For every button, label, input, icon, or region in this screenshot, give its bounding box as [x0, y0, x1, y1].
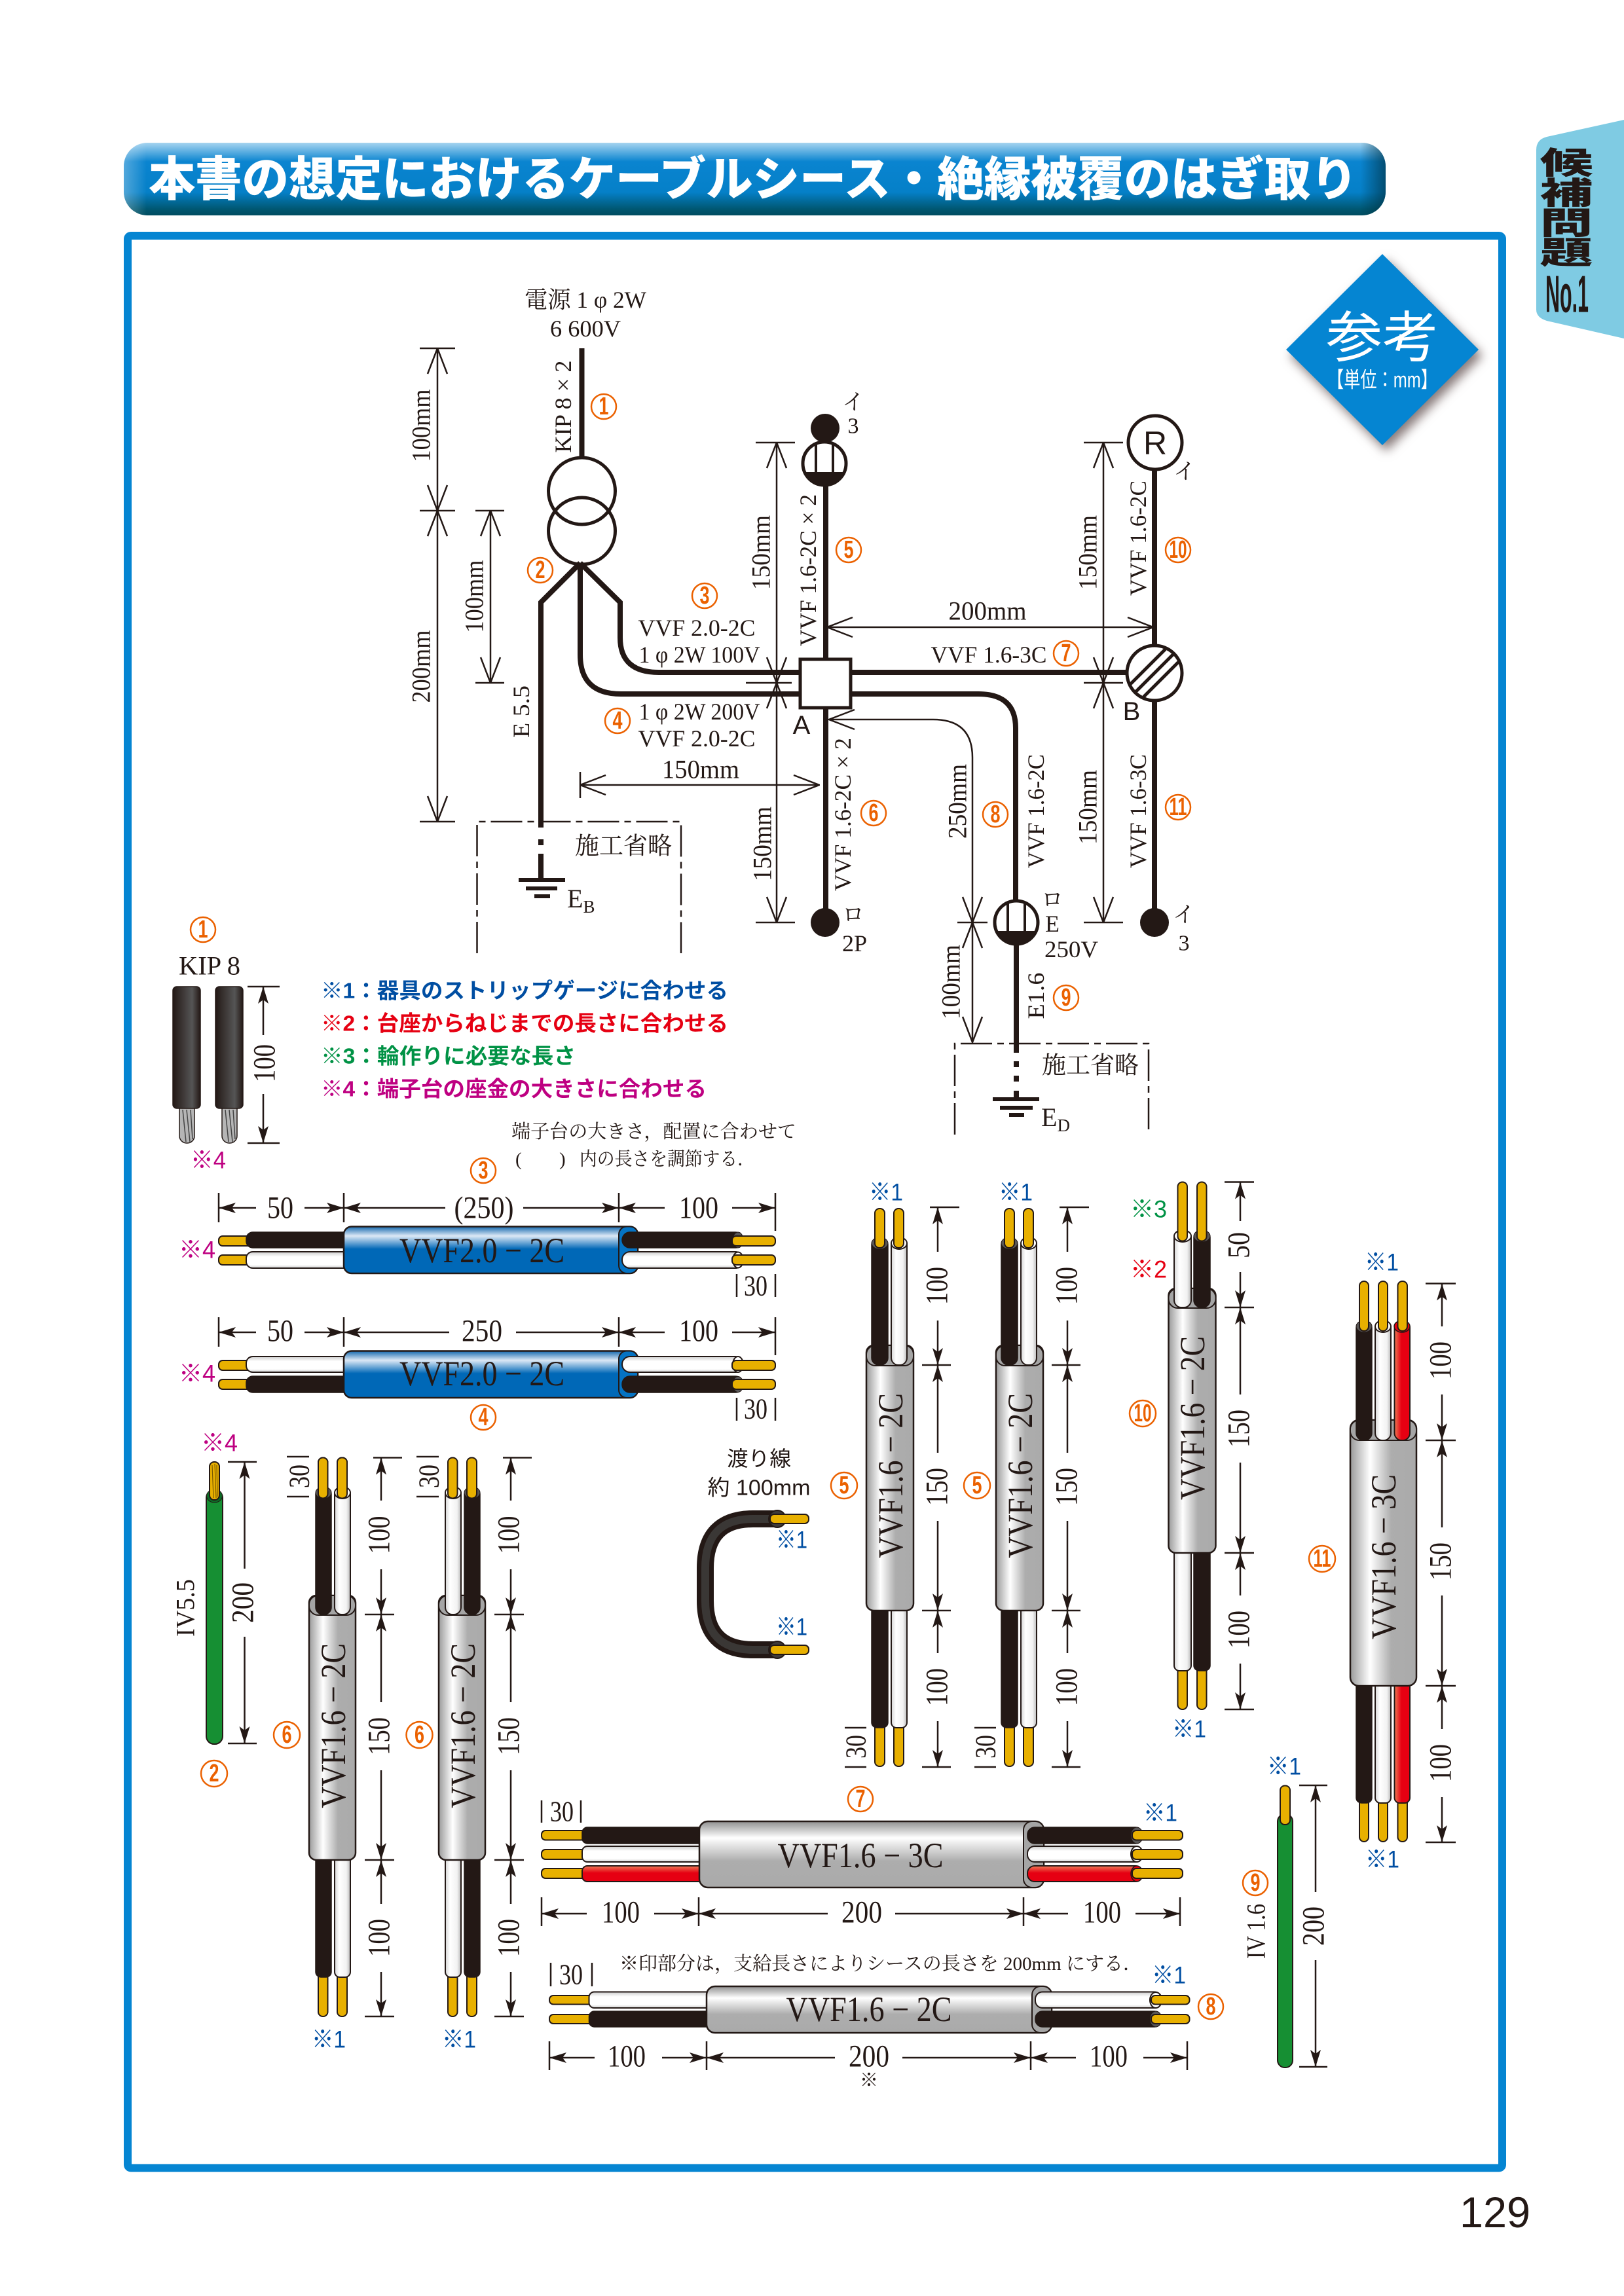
schematic dimension lines: 150mm — [1073, 515, 1103, 590]
part 11: VVF1.6-3C vertical: VVF1.6 − 3C — [1364, 1474, 1403, 1639]
ground ED: E — [1041, 1102, 1057, 1132]
switch ro 2P: ロ — [842, 903, 864, 927]
part 4: VVF2.0-2C blue cable: VVF2.0 − 2C — [399, 1354, 564, 1393]
wiring diagram — [406, 287, 1196, 1135]
wire labels: 1 φ 2W 200V — [639, 699, 760, 725]
part 2: IV5.5 green wire: 2 — [210, 1760, 219, 1787]
junction box A — [793, 486, 1128, 921]
title bar — [124, 143, 1386, 215]
power source label: 電源 1 φ 2W — [525, 287, 646, 313]
part 5: VVF1.6-2C vertical B: VVF1.6 − 2C — [1001, 1393, 1040, 1558]
wire labels: VVF 1.6-2C × 2 — [795, 494, 821, 646]
part 9: IV1.6 green wire — [1242, 1753, 1331, 2068]
part 4: VVF2.0-2C blue cable: 250 — [462, 1313, 502, 1349]
schematic dimension lines: 150mm — [1073, 770, 1103, 845]
part 8: VVF1.6-2C horizontal: ※1 — [1152, 1961, 1186, 1989]
part 8: VVF1.6-2C horizontal: 100 — [1090, 2039, 1128, 2074]
main frame — [128, 236, 1502, 2168]
part 5: VVF1.6-2C vertical B — [964, 1178, 1089, 1767]
note: terminal block adjustment: 内の長さを調節する． — [580, 1148, 755, 1170]
lamp R and box B: 3 — [1179, 931, 1189, 956]
switch ro 2P — [811, 903, 867, 957]
power source label — [525, 287, 646, 342]
part 9: IV1.6 green wire: IV 1.6 — [1242, 1904, 1270, 1959]
junction box A: A — [793, 711, 811, 740]
part 1: KIP 8 wires: 100 — [248, 1044, 282, 1082]
lamp R and box B: R — [1143, 425, 1167, 462]
wire labels: E 5.5 — [508, 685, 534, 738]
part 6: VVF1.6-2C vertical B: 30 — [413, 1465, 445, 1488]
schematic dimension lines: 150mm — [748, 807, 777, 881]
part 1: KIP 8 wires: 1 — [198, 916, 208, 943]
circled numbers on diagram: 3 — [699, 582, 710, 610]
ground ED: D — [1057, 1116, 1070, 1135]
part 5: VVF1.6-2C vertical B: 30 — [969, 1735, 1002, 1758]
power source label: 6 600V — [550, 316, 621, 342]
schematic dimension lines: 100mm — [460, 560, 489, 632]
wire labels — [508, 360, 1151, 1019]
note: sheath length: ※印部分は，支給長さによりシースの長さを 200mm にする． — [619, 1953, 1142, 1975]
circled numbers on diagram: 2 — [536, 556, 545, 584]
part 3: VVF2.0-2C blue cable: 100 — [679, 1190, 718, 1226]
lamp R and box B: イ — [1173, 903, 1195, 927]
part 6: VVF1.6-2C vertical B: 6 — [415, 1721, 424, 1749]
part 4: VVF2.0-2C blue cable — [179, 1313, 775, 1431]
part 6: VVF1.6-2C vertical B: ※1 — [442, 2026, 476, 2053]
part 8: VVF1.6-2C horizontal: 8 — [1206, 1993, 1215, 2020]
omitted work box left — [477, 822, 681, 953]
jumper wire: 約 100mm — [707, 1476, 811, 1499]
part 6: VVF1.6-2C vertical A: 100 — [361, 1516, 397, 1554]
circled numbers on diagram: 8 — [990, 801, 1001, 828]
part 9: IV1.6 green wire: 200 — [1297, 1906, 1331, 1946]
part 5: VVF1.6-2C vertical B: 100 — [1049, 1668, 1084, 1706]
wire labels: 1 φ 2W 100V — [639, 642, 760, 668]
note: terminal block adjustment — [511, 1121, 796, 1170]
part 7: VVF1.6-3C horizontal: 100 — [602, 1895, 640, 1930]
lamp R and box B: B — [1123, 697, 1140, 726]
ground ED — [993, 1099, 1070, 1135]
wire labels: VVF 2.0-2C — [638, 615, 756, 641]
part 10: VVF1.6-2C vertical: VVF1.6 − 2C — [1173, 1336, 1212, 1500]
part 4: VVF2.0-2C blue cable: 100 — [679, 1313, 718, 1349]
schematic dimension lines: 150mm — [747, 515, 775, 590]
jumper wire: 渡り線 — [727, 1447, 791, 1470]
part 5: VVF1.6-2C vertical B: 100 — [1049, 1267, 1084, 1305]
lamp R and box B: イ — [1173, 460, 1196, 484]
wire labels: VVF 2.0-2C — [638, 725, 756, 752]
schematic dimension lines — [406, 348, 1153, 1042]
omitted work box right — [955, 1044, 1149, 1135]
part 10: VVF1.6-2C vertical: 100 — [1222, 1611, 1256, 1649]
page tab: 候補問題 No.1 — [1536, 120, 1624, 338]
part 6: VVF1.6-2C vertical A — [274, 1457, 402, 2053]
part 2: IV5.5 green wire: 200 — [225, 1582, 261, 1623]
legend notes: ※1：器具のストリップゲージに合わせる — [321, 978, 728, 1003]
schematic dimension lines: 250mm — [943, 764, 972, 839]
part 6: VVF1.6-2C vertical A: 30 — [283, 1465, 316, 1488]
part 4: VVF2.0-2C blue cable: 4 — [478, 1404, 489, 1431]
part 6: VVF1.6-2C vertical A: 6 — [282, 1721, 292, 1749]
transformer with wires — [541, 348, 800, 880]
lamp R and box B — [1123, 416, 1196, 956]
part 11: VVF1.6-3C vertical: 150 — [1424, 1542, 1458, 1580]
receptacle E 250V: E — [1045, 911, 1060, 937]
omitted work box left: 施工省略 — [575, 833, 672, 860]
circled numbers on diagram: 1 — [599, 393, 609, 420]
omitted work box right: 施工省略 — [1042, 1051, 1139, 1079]
switch ro 2P: 2P — [842, 930, 867, 957]
circled numbers on diagram: 10 — [1170, 536, 1187, 564]
part 6: VVF1.6-2C vertical B — [406, 1457, 532, 2053]
part 11: VVF1.6-3C vertical: 11 — [1314, 1545, 1331, 1573]
outlet top: 3 — [847, 414, 859, 439]
part 10: VVF1.6-2C vertical: ※1 — [1172, 1715, 1206, 1743]
part 9: IV1.6 green wire: ※1 — [1267, 1753, 1301, 1779]
legend notes — [321, 978, 728, 1101]
part 7: VVF1.6-3C horizontal: VVF1.6 − 3C — [778, 1836, 943, 1875]
part 6: VVF1.6-2C vertical A: VVF1.6 − 2C — [314, 1643, 353, 1808]
part 10: VVF1.6-2C vertical: 50 — [1222, 1232, 1256, 1258]
part 2: IV5.5 green wire: IV5.5 — [170, 1579, 200, 1637]
part 6: VVF1.6-2C vertical A: ※1 — [312, 2026, 346, 2053]
part 4: VVF2.0-2C blue cable: ※4 — [179, 1360, 215, 1387]
part 3: VVF2.0-2C blue cable: VVF2.0 − 2C — [399, 1231, 564, 1270]
part 6: VVF1.6-2C vertical B: VVF1.6 − 2C — [443, 1643, 483, 1808]
schematic dimension lines: 150mm — [662, 754, 739, 784]
wire labels: E1.6 — [1023, 973, 1049, 1019]
wire labels: VVF 1.6-2C — [1125, 481, 1151, 596]
part 6: VVF1.6-2C vertical A: 100 — [361, 1919, 397, 1957]
part 6: VVF1.6-2C vertical B: 150 — [491, 1717, 526, 1755]
part 5: VVF1.6-2C vertical A: 100 — [919, 1267, 955, 1305]
ground EB: E — [567, 884, 583, 913]
circled numbers on diagram: 9 — [1061, 984, 1071, 1011]
part 1: KIP 8 wires — [173, 916, 282, 1173]
note: terminal block adjustment: 端子台の大きさ，配置に合わせて — [511, 1121, 796, 1142]
part 6: VVF1.6-2C vertical A: 150 — [361, 1717, 397, 1755]
part 10: VVF1.6-2C vertical: ※2 — [1130, 1256, 1167, 1283]
page tab: 候補問題 No.1: 題 — [1540, 236, 1593, 270]
part 10: VVF1.6-2C vertical: 150 — [1222, 1410, 1256, 1448]
outlet top: イ — [842, 390, 864, 415]
part 11: VVF1.6-3C vertical: 100 — [1424, 1744, 1458, 1782]
part 10: VVF1.6-2C vertical: ※3 — [1130, 1195, 1167, 1223]
wire labels: VVF 1.6-3C — [1125, 754, 1151, 868]
schematic dimension lines: 100mm — [406, 389, 436, 462]
reference badge: 参考 — [1326, 307, 1439, 369]
reference badge — [1286, 254, 1479, 445]
legend notes: ※3：輪作りに必要な長さ — [321, 1044, 576, 1068]
part 8: VVF1.6-2C horizontal — [549, 1959, 1223, 2091]
part 8: VVF1.6-2C horizontal: ※ — [860, 2070, 878, 2091]
part 5: VVF1.6-2C vertical A: ※1 — [869, 1178, 903, 1206]
note: terminal block adjustment: ) — [559, 1149, 566, 1170]
part 9: IV1.6 green wire: 9 — [1251, 1869, 1260, 1897]
receptacle E 250V — [995, 888, 1098, 1100]
page tab: 候補問題 No.1: 候 — [1540, 147, 1593, 181]
part 5: VVF1.6-2C vertical B: 150 — [1049, 1468, 1084, 1506]
part 5: VVF1.6-2C vertical A — [831, 1178, 959, 1767]
part 7: VVF1.6-3C horizontal — [542, 1785, 1183, 1930]
part 5: VVF1.6-2C vertical A: 100 — [919, 1668, 955, 1706]
circled numbers on diagram: 5 — [843, 536, 854, 564]
part 11: VVF1.6-3C vertical — [1309, 1249, 1458, 1872]
ground EB: B — [583, 897, 595, 917]
part 7: VVF1.6-3C horizontal: 7 — [855, 1785, 866, 1813]
part 1: KIP 8 wires: KIP 8 — [179, 951, 240, 981]
part 8: VVF1.6-2C horizontal: 100 — [608, 2039, 646, 2074]
part 10: VVF1.6-2C vertical — [1130, 1182, 1256, 1743]
circled numbers on diagram: 11 — [1170, 793, 1187, 821]
wire labels: VVF 1.6-3C — [931, 642, 1046, 668]
legend notes: ※4：端子台の座金の大きさに合わせる — [321, 1076, 707, 1101]
circled numbers on diagram: 4 — [613, 707, 622, 735]
title bar: 本書の想定におけるケーブルシース・絶縁被覆のはぎ取り — [149, 154, 1357, 206]
receptacle E 250V: ロ — [1041, 888, 1063, 913]
jumper wire: ※1 — [776, 1527, 807, 1553]
part 3: VVF2.0-2C blue cable: 50 — [267, 1190, 293, 1226]
part 5: VVF1.6-2C vertical B: ※1 — [999, 1178, 1033, 1206]
part 3: VVF2.0-2C blue cable: 3 — [478, 1157, 489, 1184]
circled numbers on diagram: 6 — [868, 799, 879, 827]
part 11: VVF1.6-3C vertical: ※1 — [1365, 1249, 1399, 1275]
receptacle E 250V: 250V — [1044, 936, 1098, 962]
schematic dimension lines: 200mm — [948, 596, 1027, 626]
part 5: VVF1.6-2C vertical A: VVF1.6 − 2C — [871, 1393, 910, 1558]
jumper wire — [705, 1447, 811, 1658]
part 4: VVF2.0-2C blue cable: 30 — [744, 1393, 767, 1425]
schematic dimension lines: 100mm — [936, 945, 965, 1019]
wire labels: VVF 1.6-2C — [1023, 754, 1049, 868]
part 6: VVF1.6-2C vertical B: 100 — [491, 1919, 526, 1957]
wire labels: KIP 8 × 2 — [550, 360, 576, 453]
part 8: VVF1.6-2C horizontal: VVF1.6 − 2C — [786, 1990, 952, 2029]
note: terminal block adjustment: ( — [515, 1149, 522, 1170]
part 7: VVF1.6-3C horizontal: 100 — [1083, 1895, 1121, 1930]
jumper wire: ※1 — [776, 1613, 807, 1641]
part 4: VVF2.0-2C blue cable: 50 — [267, 1313, 293, 1349]
part 11: VVF1.6-3C vertical: 100 — [1424, 1341, 1458, 1379]
part 11: VVF1.6-3C vertical: ※1 — [1365, 1846, 1399, 1872]
circled numbers on diagram — [528, 393, 1190, 1011]
page tab: 候補問題 No.1: 補 — [1540, 177, 1593, 211]
part 10: VVF1.6-2C vertical: 10 — [1134, 1400, 1151, 1427]
part 3: VVF2.0-2C blue cable: 30 — [744, 1270, 767, 1302]
reference badge: 【単位：mm】 — [1327, 368, 1437, 392]
page number: 129 — [1460, 2188, 1530, 2236]
part 1: KIP 8 wires: ※4 — [191, 1147, 226, 1173]
part 3: VVF2.0-2C blue cable: ※4 — [179, 1236, 215, 1264]
ground EB — [519, 880, 595, 917]
part 5: VVF1.6-2C vertical A: 5 — [840, 1472, 849, 1499]
schematic dimension lines: 200mm — [406, 630, 436, 703]
part 8: VVF1.6-2C horizontal: 30 — [559, 1959, 583, 1990]
wire labels: VVF 1.6-2C × 2 — [830, 738, 856, 891]
part 7: VVF1.6-3C horizontal: 200 — [841, 1895, 882, 1930]
part 5: VVF1.6-2C vertical A: 150 — [919, 1468, 955, 1506]
part 3: VVF2.0-2C blue cable: (250) — [454, 1190, 513, 1226]
part 8: VVF1.6-2C horizontal: 200 — [849, 2039, 889, 2074]
part 5: VVF1.6-2C vertical B: 5 — [972, 1472, 982, 1499]
part 2: IV5.5 green wire: ※4 — [201, 1430, 238, 1456]
part 7: VVF1.6-3C horizontal: ※1 — [1143, 1799, 1177, 1827]
part 2: IV5.5 green wire — [170, 1430, 261, 1787]
part 7: VVF1.6-3C horizontal: 30 — [550, 1795, 574, 1828]
part 5: VVF1.6-2C vertical A: 30 — [840, 1735, 872, 1758]
part 3: VVF2.0-2C blue cable — [179, 1157, 775, 1302]
circled numbers on diagram: 7 — [1061, 640, 1071, 667]
part 6: VVF1.6-2C vertical B: 100 — [491, 1516, 526, 1554]
page tab: 候補問題 No.1: 問 — [1540, 207, 1593, 241]
legend notes: ※2：台座からねじまでの長さに合わせる — [321, 1011, 728, 1036]
outlet top — [803, 390, 864, 485]
